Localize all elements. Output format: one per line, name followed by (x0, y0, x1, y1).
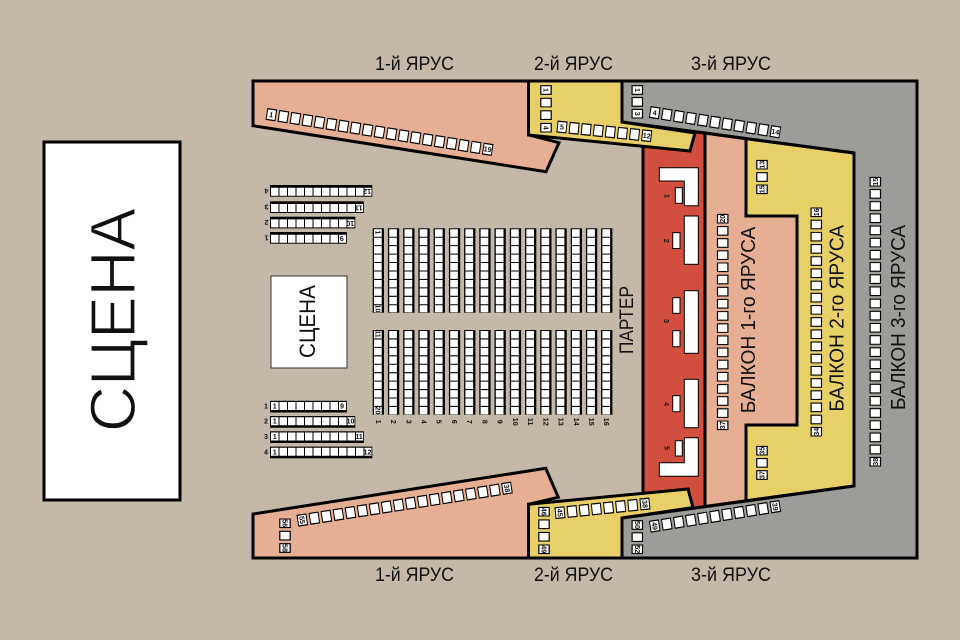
tier headings bottom: 2-й ЯРУС (534, 565, 613, 586)
tier headings top: 1-й ЯРУС (375, 54, 454, 75)
seats: second tier bottom column: 49 (539, 545, 548, 553)
seats: third balcony column (871, 177, 880, 467)
seats: first balcony column: 37 (718, 421, 727, 429)
seats: third tier bottom row: 39 (770, 502, 780, 511)
seats: second balcony main column: 34 (812, 428, 821, 436)
parterre row numbers: 11 (526, 418, 535, 426)
parterre row numbers: 13 (556, 418, 565, 426)
seats: third tier top row (650, 108, 780, 137)
seats: lower side rows: 3 (264, 432, 268, 441)
boxes: red section: 2 (662, 239, 671, 243)
seats: second balcony upper column: 15 (758, 185, 767, 193)
parterre row numbers: 1 (374, 420, 383, 424)
seats: lower side rows: 2 (264, 417, 268, 426)
seats: second tier top column (541, 85, 550, 133)
seats: upper side rows (264, 185, 372, 244)
large stage panel (44, 142, 180, 500)
balcony 3 label: БАЛКОН 3-го ЯРУСА (887, 225, 910, 410)
seats: second tier top row: 12 (642, 131, 651, 141)
tier headings top: 3-й ЯРУС (691, 54, 771, 75)
seats: second tier bottom row: 45 (555, 508, 565, 517)
parterre row numbers: 7 (465, 420, 474, 424)
panel: third tier and third balcony (622, 81, 917, 558)
seats: first tier bottom column: 56 (280, 519, 289, 527)
boxes: red section: 1 (662, 194, 671, 198)
seats: parterre columns: 10 (373, 304, 382, 312)
parterre row numbers: 3 (404, 420, 413, 424)
seats: lower side rows: 1 (273, 432, 277, 441)
seats: second balcony lower column (758, 446, 767, 480)
seats: second tier top column: 1 (541, 88, 550, 92)
seats: lower side rows (264, 401, 372, 458)
parterre row numbers: 12 (541, 418, 550, 426)
seats: second tier bottom column (539, 507, 548, 554)
seats: second balcony lower column: 37 (758, 471, 767, 479)
seats: third tier bottom row (650, 502, 780, 531)
seats: lower side rows: 1 (273, 402, 277, 411)
seats: first balcony column (718, 214, 727, 430)
seats: lower side rows: 1 (273, 447, 277, 456)
seats: second tier bottom row (555, 500, 650, 517)
seats: upper side rows: 11 (355, 203, 363, 212)
panel: first balcony (705, 133, 797, 507)
boxes: red section: 3 (662, 319, 671, 323)
seats: first tier bottom row: 55 (297, 515, 307, 525)
parterre row numbers: 9 (496, 420, 505, 424)
tier headings bottom: 1-й ЯРУС (375, 565, 454, 586)
panel: second balcony (746, 139, 854, 501)
seats: second balcony upper column (758, 160, 767, 194)
panel: second tier top (528, 81, 695, 151)
seats: first tier bottom row: 38 (502, 484, 512, 493)
parterre row numbers: 15 (587, 418, 596, 426)
seats: first tier top row (266, 110, 493, 154)
seats: lower side rows: 1 (273, 417, 277, 426)
seats: first tier bottom column (280, 518, 289, 553)
seats: first tier top row: 1 (269, 110, 274, 119)
seats: second balcony main column: 16 (812, 208, 821, 216)
parterre row numbers: 2 (389, 420, 398, 424)
seats: lower side rows: 10 (346, 417, 354, 426)
seats: second balcony upper column: 13 (758, 161, 767, 169)
seats: first tier bottom row (297, 484, 512, 525)
tier headings top: 2-й ЯРУС (534, 54, 613, 75)
parterre row numbers (374, 418, 611, 426)
panel: second tier bottom (528, 489, 693, 558)
seats: second tier bottom row: 38 (640, 500, 650, 508)
seats: first tier top row: 19 (483, 144, 492, 154)
seats: upper side rows: 1 (264, 233, 268, 242)
balcony 1 label: БАЛКОН 1-го ЯРУСА (737, 226, 760, 413)
seats: upper side rows: 10 (346, 219, 354, 228)
panel: red boxes area (643, 125, 705, 515)
seats: third tier bottom row: 49 (650, 521, 660, 531)
seats: parterre columns: 20 (373, 406, 382, 414)
seats: lower side rows: 1 (264, 402, 268, 411)
seats: parterre columns (373, 228, 612, 415)
seats: first tier bottom column: 58 (280, 544, 289, 552)
seats: upper side rows: 9 (340, 234, 344, 243)
seats: first balcony column: 20 (718, 215, 727, 223)
seats: third tier bottom column: 50 (633, 521, 642, 529)
seats: upper side rows: 2 (264, 218, 268, 227)
seats: second tier top row (557, 122, 652, 141)
boxes: red section (659, 168, 698, 476)
parterre label: ПАРТЕР (617, 286, 638, 354)
parterre row numbers: 8 (480, 420, 489, 424)
seats: lower side rows: 11 (355, 432, 363, 441)
frame and third tier outline (253, 81, 917, 558)
small stage panel (271, 276, 347, 368)
seats: third tier top column: 1 (633, 88, 642, 92)
seats: lower side rows: 4 (264, 447, 268, 456)
seats: third tier bottom column (633, 520, 642, 554)
small stage panel: СЦЕНА (295, 285, 320, 358)
seats: third tier top row: 14 (771, 127, 780, 137)
parterre row numbers: 4 (419, 420, 428, 424)
seats: second tier top row: 5 (560, 122, 564, 132)
large stage panel: СЦЕНА (77, 208, 149, 432)
seats: second tier top column: 4 (541, 126, 550, 130)
seats: third balcony column: 38 (871, 458, 880, 466)
tier headings bottom (375, 565, 771, 586)
seats: third tier top column: 3 (633, 112, 642, 116)
seats: second balcony main column (812, 207, 821, 437)
seats: third balcony column: 15 (871, 178, 880, 186)
seats: third tier top row: 4 (652, 108, 657, 117)
boxes: red section: 4 (662, 402, 671, 406)
seats: parterre columns: 11 (373, 330, 382, 338)
boxes: red section: 5 (662, 446, 671, 450)
seats: second tier bottom column: 46 (539, 508, 548, 516)
seats: second balcony lower column: 35 (758, 447, 767, 455)
parterre row numbers: 16 (602, 418, 611, 426)
parterre row numbers: 6 (450, 420, 459, 424)
parterre row numbers: 14 (572, 418, 581, 426)
panel: first tier bottom (253, 468, 558, 558)
seats: upper side rows: 3 (264, 202, 268, 211)
seats: lower side rows: 9 (340, 402, 344, 411)
tier headings bottom: 3-й ЯРУС (691, 565, 771, 586)
seats: parterre columns: 1 (373, 230, 382, 234)
parterre row numbers: 10 (511, 418, 520, 426)
seats: upper side rows: 12 (363, 187, 371, 196)
seats: third tier top column (633, 85, 642, 119)
seats: third tier bottom column: 52 (633, 545, 642, 553)
seats: lower side rows: 12 (364, 447, 372, 456)
tier headings top (375, 54, 771, 75)
parterre row numbers: 5 (435, 420, 444, 424)
panel: first tier top (253, 81, 559, 172)
seats: upper side rows: 4 (264, 186, 268, 195)
balcony 2 label: БАЛКОН 2-го ЯРУСА (825, 225, 848, 412)
